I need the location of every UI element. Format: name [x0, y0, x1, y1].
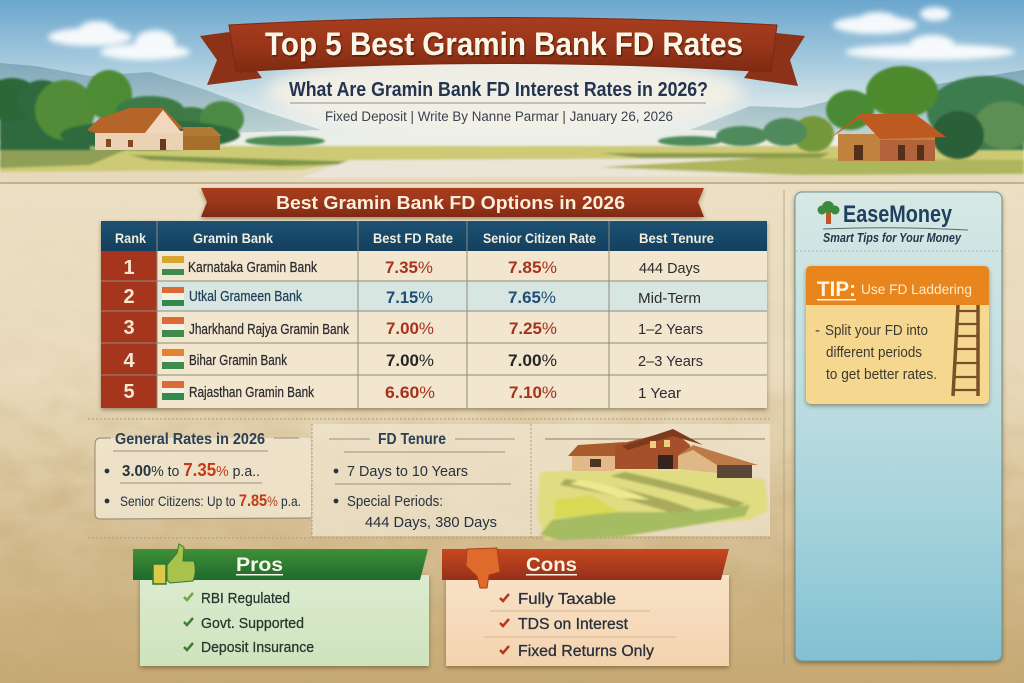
- barn: [568, 429, 758, 478]
- brand name: EaseMoney: [843, 201, 953, 228]
- table header: [115, 230, 714, 246]
- title banner: [200, 18, 805, 86]
- senior citizen rates: 7.25%: [509, 320, 557, 338]
- best tenure: [638, 260, 703, 402]
- best tenure: 2–3 Years: [638, 353, 703, 370]
- right ribbon tail: [744, 33, 805, 86]
- section banner: [201, 188, 704, 217]
- bank names: Rajasthan Gramin Bank: [189, 385, 315, 401]
- byline: Fixed Deposit | Write By Nanne Parmar | January 26, 2026: [325, 109, 673, 124]
- pros header: [133, 549, 428, 580]
- table: FD rates: [101, 221, 767, 408]
- subtitle rule: [290, 102, 706, 104]
- table header: Rank: [115, 230, 146, 246]
- icon: thumbs down: [466, 548, 500, 588]
- right tree line: [658, 66, 1024, 159]
- table header: Best FD Rate: [373, 230, 453, 246]
- pros title: Pros: [236, 555, 283, 576]
- cons list: Fixed Returns Only: [518, 643, 654, 660]
- best tenure: 444 Days: [639, 260, 700, 277]
- title text: Top 5 Best Gramin Bank FD Rates: [265, 26, 743, 62]
- tip text: -: [815, 322, 820, 339]
- info strip backing: [312, 424, 770, 536]
- crop field: [537, 469, 768, 540]
- cons list: [500, 591, 654, 660]
- rank numbers: 3: [123, 317, 135, 339]
- pros list: Govt. Supported: [201, 615, 304, 632]
- senior citizen rates: [508, 259, 557, 402]
- best tenure: Mid-Term: [638, 290, 701, 307]
- best tenure: 1 Year: [638, 385, 681, 402]
- bank names: Jharkhand Rajya Gramin Bank: [189, 322, 350, 338]
- subtitle: What Are Gramin Bank FD Interest Rates in 2026?: [289, 79, 708, 101]
- tip text: to get better rates.: [826, 366, 937, 383]
- bank names: Utkal Grameen Bank: [189, 289, 303, 305]
- rate range: 3.00% to 7.35% p.a..: [122, 460, 260, 480]
- cons title: Cons: [526, 555, 577, 576]
- cons list: Fully Taxable: [518, 591, 616, 608]
- ribbon body: [229, 18, 777, 72]
- panel: EaseMoney sidebar: [795, 192, 1002, 661]
- tip text: Split your FD into: [825, 322, 928, 339]
- left ribbon tail: [200, 32, 262, 85]
- senior citizen rates: 7.85%: [508, 259, 557, 277]
- table header: Gramin Bank: [193, 230, 273, 246]
- rank numbers: 5: [123, 381, 135, 403]
- cons list: TDS on Interest: [518, 616, 629, 633]
- left tree line: [0, 70, 325, 150]
- best FD rates: [385, 259, 435, 402]
- left farmhouse: [87, 108, 222, 150]
- icon: thumbs up: [153, 544, 195, 584]
- table header: Best Tenure: [639, 230, 714, 246]
- illustration: barn and crop field: [537, 429, 768, 540]
- distant mountains: [0, 63, 1024, 140]
- senior citizen rates: 7.00%: [508, 352, 557, 370]
- best FD rates: 7.15%: [386, 289, 433, 307]
- bank names: Bihar Gramin Bank: [189, 353, 288, 369]
- senior citizen rates: 7.10%: [509, 384, 557, 402]
- tip text: [815, 322, 937, 383]
- tip header: [806, 266, 989, 305]
- table body: [101, 221, 767, 408]
- best FD rates: 7.00%: [386, 320, 434, 338]
- cons header: [442, 549, 729, 580]
- rank numbers: 1: [123, 257, 135, 279]
- cons card: [446, 575, 729, 666]
- best tenure: 1–2 Years: [638, 321, 703, 338]
- background: sand texture: [0, 184, 1024, 683]
- heading: General Rates in 2026: [115, 431, 265, 448]
- heading: FD Tenure: [378, 431, 446, 448]
- tip card: Use FD Laddering: [861, 281, 972, 297]
- best FD rates: 7.35%: [385, 259, 433, 277]
- table header: Senior Citizen Rate: [483, 230, 596, 246]
- special periods: 444 Days, 380 Days: [365, 514, 497, 531]
- tip text: different periods: [826, 344, 922, 361]
- special periods: [334, 493, 497, 531]
- panel: general rates: [95, 431, 311, 519]
- pale glow behind the title: [265, 50, 745, 134]
- rank numbers: [123, 257, 135, 403]
- section banner: Best Gramin Bank FD Options in 2026: [276, 192, 625, 213]
- clouds: [48, 7, 1015, 60]
- best FD rates: 7.00%: [386, 352, 434, 370]
- special periods: Special Periods:: [347, 493, 443, 510]
- senior citizen rates: 7.65%: [508, 289, 556, 307]
- right farmhouse: [829, 114, 946, 161]
- senior citizens rate: Senior Citizens: Up to 7.85% p.a.: [120, 491, 301, 510]
- pros list: Deposit Insurance: [201, 639, 314, 656]
- rank numbers: 4: [123, 350, 135, 372]
- pros list: RBI Regulated: [201, 590, 290, 607]
- best FD rates: 6.60%: [385, 384, 435, 402]
- icon: tree logo: [818, 201, 840, 224]
- bank names: Karnataka Gramin Bank: [188, 260, 318, 276]
- icon: ladder: [953, 305, 978, 396]
- fields and river: [0, 146, 1024, 183]
- icon: flags: [162, 256, 184, 400]
- tip label: TIP:: [817, 278, 856, 301]
- pros list: [184, 590, 314, 656]
- tagline: Smart Tips for Your Money: [823, 231, 962, 245]
- panel: cons: [442, 548, 729, 666]
- bank names: [188, 260, 350, 401]
- header landscape illustration: [0, 0, 1024, 183]
- panel: pros: [133, 544, 429, 666]
- panel: FD tenure: [329, 431, 515, 531]
- tip card: [806, 266, 989, 404]
- tenure range: 7 Days to 10 Years: [347, 463, 468, 480]
- rank numbers: 2: [123, 286, 135, 308]
- pros card: [140, 575, 429, 666]
